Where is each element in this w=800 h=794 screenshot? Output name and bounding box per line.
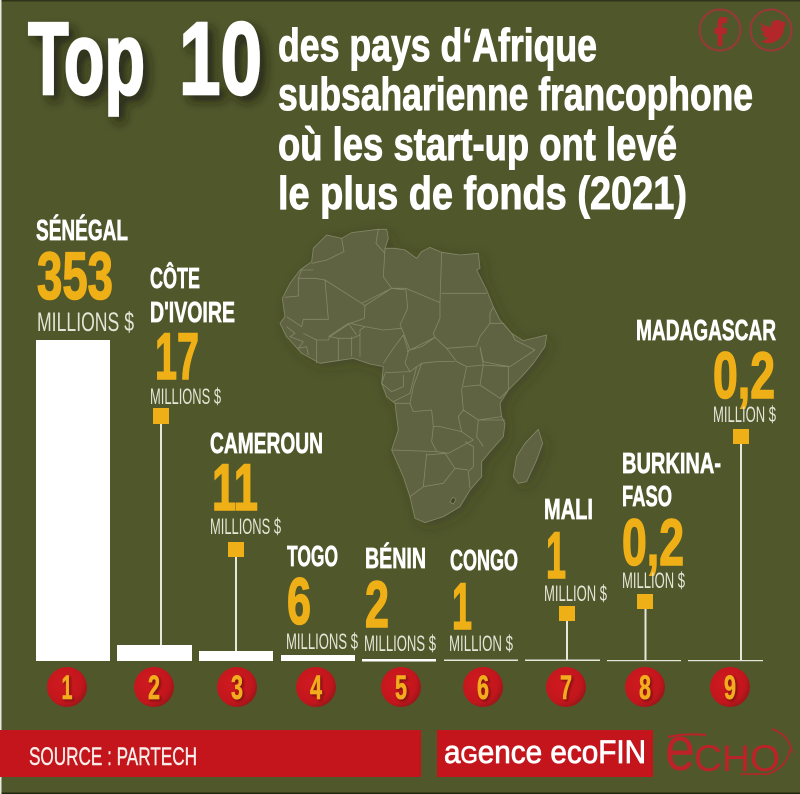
label: Côte d'Ivoire: D'IVOIRE — [150, 297, 235, 329]
value: 353: 353 — [37, 239, 113, 314]
bar 9: Madagascar — [636, 315, 776, 661]
label: Burkina-Faso: BURKINA- — [622, 448, 721, 480]
value: 6: 6 — [287, 564, 311, 638]
subtitle: où les start-up ont levé — [278, 118, 677, 170]
bar 3: Cameroun — [199, 428, 323, 661]
rank badges — [47, 667, 750, 707]
rank badges: 5 — [395, 669, 407, 707]
bar — [525, 660, 600, 661]
subtitle — [278, 19, 753, 219]
white bar — [36, 340, 110, 661]
title: Top 10: Top — [28, 1, 145, 116]
unit: MILLION $ — [544, 581, 607, 606]
source banner — [0, 730, 421, 777]
rank badges: 4 — [310, 669, 322, 707]
marker — [733, 429, 749, 444]
rank badges: 7 — [560, 669, 572, 707]
value: 17: 17 — [155, 319, 199, 393]
label: Congo: CONGO — [450, 545, 518, 577]
unit: MILLIONS $ — [37, 307, 134, 337]
logo: Echo: e — [665, 715, 695, 784]
label: Cameroun: CAMEROUN — [210, 428, 323, 460]
bar 8: Burkina-Faso — [607, 448, 721, 661]
logo: Echo — [665, 715, 792, 784]
bar 6: Congo — [444, 545, 518, 661]
unit: MILLIONS $ — [286, 629, 358, 654]
logo: Echo: CHO — [694, 738, 780, 779]
label: Mali: MALI — [544, 494, 593, 526]
marker — [153, 408, 169, 424]
label: Côte d'Ivoire: CÔTE — [150, 261, 200, 295]
source banner: SOURCE : PARTECH — [29, 743, 197, 771]
marker — [228, 542, 244, 557]
label: Bénin: BÉNIN — [365, 541, 426, 575]
unit: MILLION $ — [622, 568, 685, 593]
bar — [117, 645, 192, 661]
map of Africa — [280, 229, 547, 523]
label: Burkina-Faso: FASO — [622, 481, 672, 513]
bar — [362, 659, 436, 662]
rank badges: 1 — [62, 669, 72, 707]
value: 11: 11 — [212, 450, 258, 524]
label: Côte d'Ivoire — [150, 261, 235, 329]
bar 1: Sénégal — [36, 213, 134, 661]
label: Burkina-Faso — [622, 448, 721, 513]
unit: MILLIONS $ — [364, 631, 436, 656]
icon: facebook — [700, 10, 740, 50]
bar 4: Togo — [281, 541, 358, 661]
bar — [281, 655, 355, 661]
icon: twitter — [750, 10, 792, 50]
bar 5: Bénin — [362, 541, 436, 662]
rank badges: 3 — [231, 669, 243, 707]
logo: Agence Ecofin: aGence ecoFIN — [444, 734, 646, 770]
bar — [688, 660, 763, 661]
value: 2: 2 — [365, 567, 389, 641]
rank badges: 2 — [148, 669, 160, 707]
value: 1: 1 — [452, 569, 472, 643]
marker — [637, 594, 653, 609]
unit: MILLIONS $ — [150, 384, 221, 409]
rank badges: 8 — [639, 669, 651, 707]
rank badges: 9 — [724, 669, 736, 707]
unit: MILLIONS $ — [210, 514, 281, 539]
bar 7: Mali — [525, 494, 607, 661]
subtitle: le plus de fonds (2021) — [278, 167, 687, 219]
value: 1: 1 — [546, 518, 566, 592]
unit: MILLION $ — [449, 631, 513, 656]
subtitle: des pays d‘Afrique — [278, 19, 597, 71]
value: 0,2: 0,2 — [622, 505, 684, 579]
bar — [444, 660, 518, 661]
bar — [199, 651, 273, 661]
bar — [607, 660, 681, 661]
bar 2: Côte d'Ivoire — [117, 261, 235, 661]
title: Top 10: 10 — [179, 1, 262, 116]
label: Togo: TOGO — [287, 541, 338, 573]
label: Sénégal: SÉNÉGAL — [36, 213, 128, 247]
marker — [559, 606, 575, 621]
rank badges: 6 — [477, 669, 489, 707]
